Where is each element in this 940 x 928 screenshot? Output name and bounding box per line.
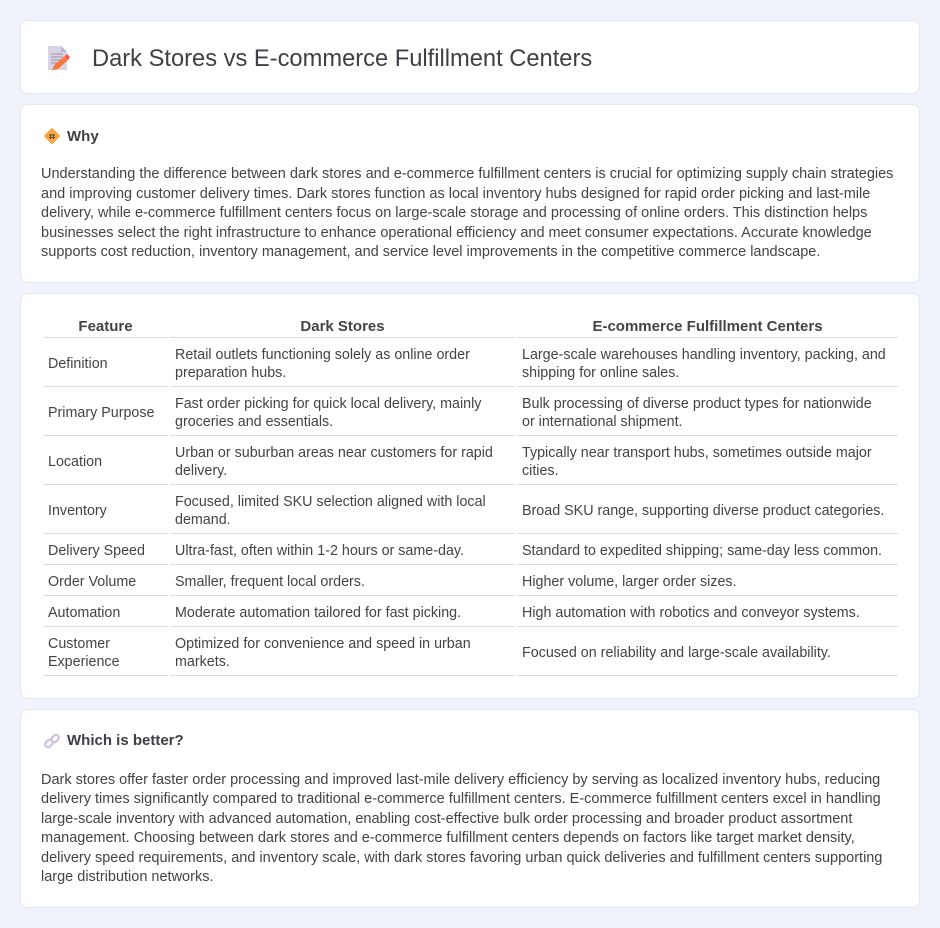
row: definition: shipping for online sales. [522, 365, 679, 381]
row: inventory: Focused, limited SKU selection aligned with local [175, 494, 486, 510]
row: primary purpose [48, 396, 872, 430]
row: location: delivery. [175, 463, 227, 479]
which is better body text: delivery times significantly compared to traditional e-commerce fulfillment centers. E-commerce fulfillment centers excel in handling [41, 791, 881, 807]
row: location: Urban or suburban areas near customers for rapid [175, 445, 493, 461]
row: location: Typically near transport hubs, sometimes outside major [522, 445, 872, 461]
row: inventory: demand. [175, 512, 231, 528]
row: order volume [48, 574, 737, 590]
row: customer experience: Focused on reliability and large-scale availability. [522, 645, 831, 661]
row: customer experience: Customer [48, 636, 110, 652]
row: delivery speed: Standard to expedited shipping; same-day less common. [522, 543, 882, 559]
why body text: Understanding the difference between dark stores and e-commerce fulfillment centers is crucial for optimizing supply chain strategies [41, 166, 893, 182]
panel: which is better [20, 709, 920, 908]
row: primary purpose: or international shipment. [522, 414, 683, 430]
table header: Dark Stores [300, 318, 385, 335]
row: primary purpose: Fast order picking for quick local delivery, mainly [175, 396, 481, 412]
row: customer experience: Experience [48, 654, 120, 670]
which is better body text [41, 772, 882, 885]
row: delivery speed: Ultra-fast, often within 1-2 hours or same-day. [175, 543, 464, 559]
table header [78, 318, 823, 335]
row: inventory [48, 494, 884, 528]
title: Dark Stores vs E-commerce Fulfillment Centers [92, 46, 592, 72]
which is better body text: management. Choosing between dark stores and e-commerce fulfillment centers depends on factors like target market density, [41, 830, 855, 846]
row: customer experience [48, 636, 831, 670]
why body text: and improving customer delivery times. Dark stores function as local inventory hubs designed for rapid order picking and last-mile [41, 186, 870, 202]
why body text: delivery, while e-commerce fulfillment centers focus on large-scale storage and processing of online orders. This distinction helps [41, 205, 867, 221]
row: delivery speed [48, 543, 882, 559]
heading: why: Why [67, 128, 99, 145]
table header: Feature [78, 318, 133, 335]
icon: warning diamond [44, 128, 60, 144]
row: definition [48, 347, 886, 381]
row: order volume: Order Volume [48, 574, 136, 590]
row: definition: Retail outlets functioning solely as online order [175, 347, 470, 363]
row: definition: Large-scale warehouses handling inventory, packing, and [522, 347, 886, 363]
which is better body text: Dark stores offer faster order processing and improved last-mile delivery efficiency by serving as localized inventory hubs, reducing [41, 772, 880, 788]
row: primary purpose: Primary Purpose [48, 405, 154, 421]
which is better body text: large distribution networks. [41, 869, 213, 885]
panel: comparison table [20, 293, 920, 699]
why body text: supports cost reduction, inventory management, and service level improvements in the competitive commerce landscape. [41, 244, 820, 260]
row: automation [48, 605, 860, 621]
row: customer experience: markets. [175, 654, 230, 670]
row: customer experience: Optimized for convenience and speed in urban [175, 636, 471, 652]
row: order volume: Smaller, frequent local orders. [175, 574, 365, 590]
row: location [48, 445, 872, 479]
heading: which is better: Which is better? [67, 732, 184, 749]
row: automation: Moderate automation tailored for fast picking. [175, 605, 461, 621]
which is better body text: delivery speed requirements, and inventory scale, with dark stores favoring urban quick deliveries and fulfillment centers supporting [41, 850, 882, 866]
why body text: businesses select the right infrastructure to enhance operational efficiency and meet consumer expectations. Accurate knowledge [41, 225, 872, 241]
icon: memo with pencil [48, 46, 70, 70]
row: definition: Definition [48, 356, 108, 372]
row: order volume: Higher volume, larger order sizes. [522, 574, 737, 590]
row: inventory: Inventory [48, 503, 107, 519]
row: location: cities. [522, 463, 559, 479]
row: automation: Automation [48, 605, 120, 621]
row: delivery speed: Delivery Speed [48, 543, 145, 559]
row: automation: High automation with robotics and conveyor systems. [522, 605, 860, 621]
why body text [41, 166, 893, 260]
row: location: Location [48, 454, 102, 470]
row: primary purpose: groceries and essentials. [175, 414, 333, 430]
row: definition: preparation hubs. [175, 365, 286, 381]
panel: why [20, 104, 920, 283]
which is better body text: large-scale inventory with advanced automation, enabling cost-effective bulk order processing and broader product assortment [41, 811, 852, 827]
row: inventory: Broad SKU range, supporting diverse product categories. [522, 503, 884, 519]
table header: E-commerce Fulfillment Centers [592, 318, 823, 335]
icon: link [44, 734, 60, 748]
panel: title header [20, 20, 920, 94]
row: primary purpose: Bulk processing of diverse product types for nationwide [522, 396, 872, 412]
